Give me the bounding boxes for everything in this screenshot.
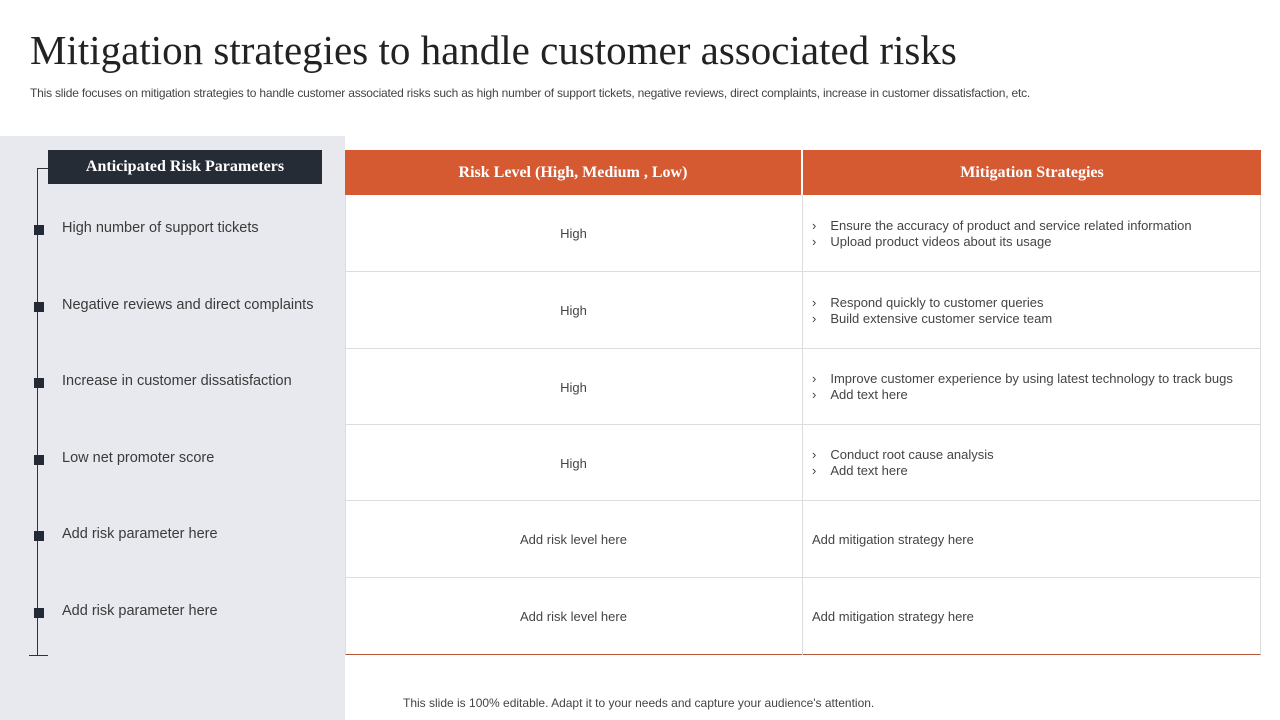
table: Upload product videos about its usage xyxy=(830,234,1052,248)
heading: anticipated risk parameters xyxy=(48,150,322,184)
subtitle: This slide focuses on mitigation strategies to handle customer associated risks such as high number of support tickets, negative reviews, direct complaints, increase in customer dissatisfaction, etc. xyxy=(30,86,1030,100)
parameter items xyxy=(34,220,313,619)
table header xyxy=(345,150,801,195)
table: High xyxy=(560,456,587,470)
table: Mitigation Strategies xyxy=(960,164,1104,180)
parameter items: Negative reviews and direct complaints xyxy=(62,297,313,313)
parameter items: High number of support tickets xyxy=(62,220,259,236)
table: Ensure the accuracy of product and service related information xyxy=(830,218,1192,232)
footer note: This slide is 100% editable. Adapt it to your needs and capture your audience's attention. xyxy=(403,696,874,710)
title: Mitigation strategies to handle customer associated risks xyxy=(30,27,957,73)
table: Add risk level here xyxy=(520,609,627,624)
table: High xyxy=(560,226,587,241)
parameter items: Add risk parameter here xyxy=(62,526,218,542)
table: Respond quickly to customer queries xyxy=(830,294,1044,310)
table: Add mitigation strategy here xyxy=(812,532,974,547)
table: Improve customer experience by using latest technology to track bugs xyxy=(830,371,1233,386)
table: Build extensive customer service team xyxy=(830,310,1052,326)
heading: anticipated risk parameters: Anticipated Risk Parameters xyxy=(86,158,284,175)
table header: Risk Level (High, Medium , Low) xyxy=(459,164,687,180)
table: Add text here xyxy=(830,463,908,478)
timeline line xyxy=(37,168,38,655)
table: Add mitigation strategy here xyxy=(812,609,974,624)
table: High xyxy=(560,380,587,394)
table: Add risk level here xyxy=(520,532,627,547)
panel: risk parameters xyxy=(0,136,345,720)
parameter items: Low net promoter score xyxy=(62,450,214,466)
table: Add text here xyxy=(830,387,908,402)
parameter items: Add risk parameter here xyxy=(62,603,218,619)
table: High xyxy=(560,303,587,318)
table: Conduct root cause analysis xyxy=(830,447,994,462)
parameter items: Increase in customer dissatisfaction xyxy=(62,373,292,389)
